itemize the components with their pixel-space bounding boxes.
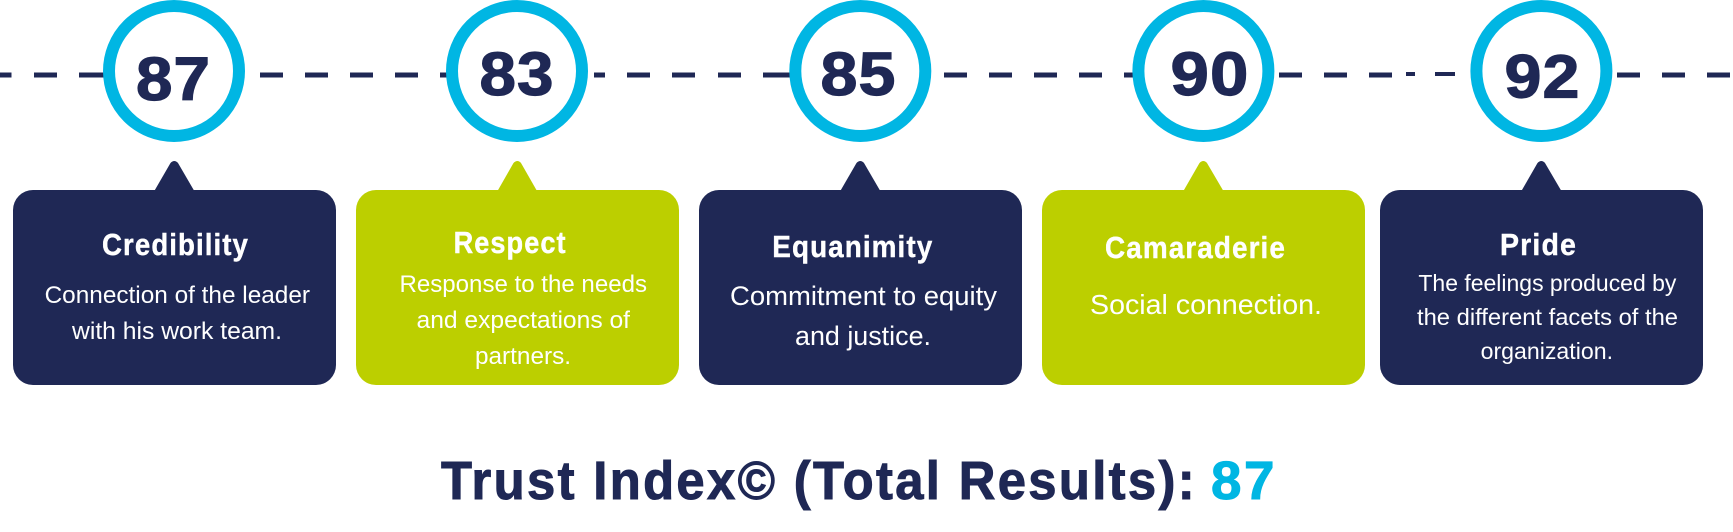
score circle: Respect 83: 83 [480, 40, 554, 108]
panel: Respect: and expectations of [416, 307, 630, 334]
panel: Camaraderie: Camaraderie [1105, 230, 1286, 265]
panel: Camaraderie [1042, 161, 1365, 385]
panel: Equanimity: and justice. [795, 321, 931, 351]
panel: Pride: The feelings produced by [1418, 270, 1677, 296]
panel: Credibility [13, 161, 336, 385]
panel: Camaraderie: Social connection. [1090, 289, 1322, 320]
score circle: Equanimity 85 [795, 6, 925, 136]
panel: Respect: Respect [454, 225, 567, 260]
dashed timeline [0, 72, 1730, 78]
panel: Respect: Response to the needs [400, 271, 647, 298]
panel: Equanimity: Commitment to equity [730, 281, 998, 311]
panel: Equanimity: Equanimity [772, 229, 933, 264]
title: Trust Index total results: Trust Index© (Total Results): [441, 451, 1197, 511]
score circle: Pride 92: 92 [1504, 42, 1580, 110]
panel: Pride [1380, 161, 1703, 385]
score circle: Equanimity 85: 85 [820, 40, 896, 108]
score circle: Camaraderie 90: 90 [1170, 40, 1250, 108]
score circle: Credibility 87 [109, 6, 239, 136]
panel: Equanimity [699, 161, 1022, 385]
panel: Respect: partners. [475, 343, 571, 370]
panel: Pride: organization. [1481, 338, 1613, 364]
score circle: Respect 83 [452, 6, 582, 136]
panel: Pride: the different facets of the [1417, 304, 1678, 330]
panel: Credibility: Connection of the leader [45, 282, 310, 309]
panel: Credibility: Credibility [102, 227, 249, 262]
score circle: Camaraderie 90 [1138, 6, 1268, 136]
title: Trust Index total results: 87 [1211, 451, 1277, 511]
panel: Credibility: with his work team. [71, 318, 282, 345]
score circle: Pride 92 [1476, 6, 1606, 136]
panel: Respect [356, 161, 679, 385]
score circle: Credibility 87: 87 [136, 45, 211, 113]
panel: Pride: Pride [1500, 227, 1577, 262]
